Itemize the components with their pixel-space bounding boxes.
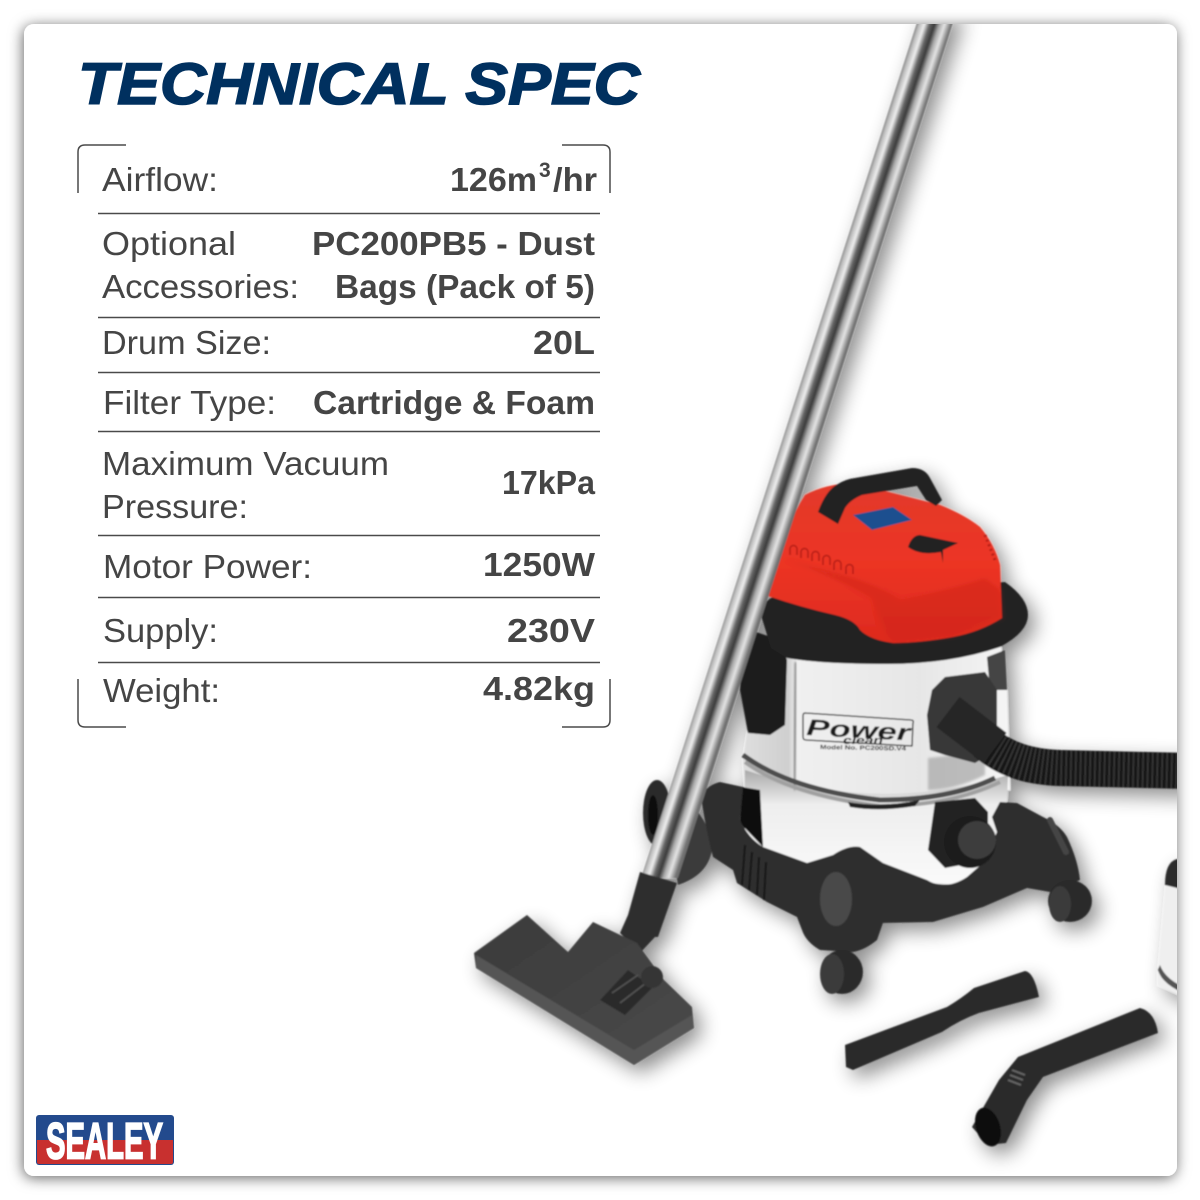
brand logo: Sealey	[36, 1112, 174, 1170]
row: maximum vacuum pressure: Maximum Vacuum	[102, 445, 389, 482]
row: optional accessories: Bags (Pack of 5)	[335, 268, 595, 305]
row: filter type: Filter Type:	[103, 384, 276, 421]
row: airflow	[102, 159, 597, 198]
row: maximum vacuum pressure: Pressure:	[102, 488, 248, 525]
product photo: vacuum cleaner and accessories	[474, 10, 1190, 1150]
casters	[820, 880, 1092, 994]
drain cap knob	[928, 798, 996, 868]
steel drum	[743, 640, 1010, 885]
row: optional accessories: Optional	[102, 225, 236, 262]
row: airflow: Airflow:	[102, 161, 218, 198]
carry handle	[818, 468, 942, 524]
crevice tool	[845, 971, 1039, 1070]
row: filter type	[103, 384, 595, 421]
row: airflow: 3	[539, 159, 551, 182]
lid rim	[760, 582, 1028, 664]
PowerClean logo on drum: Power	[806, 714, 913, 746]
row: motor power: 1250W	[483, 546, 596, 583]
row: optional accessories	[102, 225, 595, 305]
row: filter type: Cartridge & Foam	[313, 384, 595, 421]
vacuum rear wheels	[643, 780, 712, 885]
row: optional accessories: PC200PB5 - Dust	[312, 225, 595, 262]
row: maximum vacuum pressure: 17kPa	[502, 464, 596, 501]
title: TECHNICAL SPEC	[78, 52, 641, 117]
spec table frame brackets	[78, 145, 610, 727]
row: motor power	[103, 546, 596, 585]
filter cartridge	[1152, 858, 1177, 1014]
row: drum size: Drum Size:	[102, 324, 271, 361]
angled nozzle tool	[970, 1008, 1158, 1150]
row: airflow: /hr	[553, 161, 597, 198]
row: airflow: 126m	[450, 161, 537, 198]
row: motor power: Motor Power:	[103, 548, 312, 585]
row: weight: Weight:	[103, 672, 220, 709]
PowerClean logo on drum: Model No. PC200SD.V4	[820, 745, 907, 753]
brand logo: Sealey: SEALEY	[46, 1112, 163, 1170]
row: supply: Supply:	[103, 612, 218, 649]
floor head	[474, 915, 694, 1065]
chrome extension tube	[641, 10, 957, 878]
row: optional accessories: Accessories:	[102, 268, 299, 305]
red motor lid	[768, 483, 1002, 643]
tube connector	[620, 872, 677, 953]
black wheeled base	[702, 782, 1080, 952]
row: maximum vacuum pressure	[102, 445, 596, 525]
PowerClean logo on drum: clean	[843, 735, 883, 747]
row: weight: 4.82kg	[483, 670, 595, 707]
row: drum size: 20L	[533, 324, 595, 361]
row: supply	[103, 612, 595, 649]
row: drum size	[102, 324, 595, 361]
flexible hose	[948, 712, 1190, 771]
power switch	[908, 535, 958, 563]
hose connector	[927, 672, 997, 763]
drum side latch	[740, 630, 787, 735]
lid label	[853, 507, 912, 530]
row: supply: 230V	[507, 612, 595, 649]
row: weight	[103, 670, 595, 709]
PowerClean logo on drum	[803, 713, 913, 753]
spec table dividers	[98, 214, 600, 662]
